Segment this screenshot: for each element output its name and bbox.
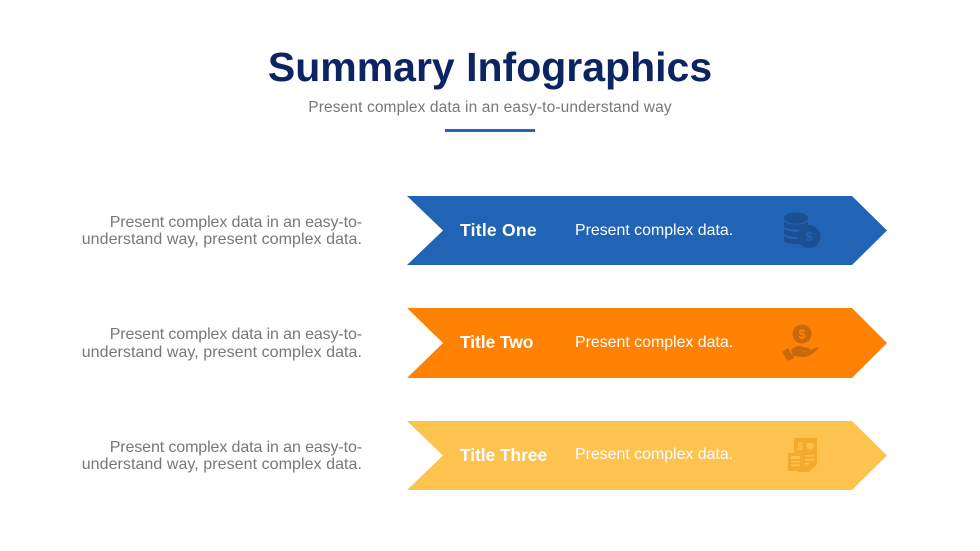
row two title: Title Two — [460, 332, 533, 352]
row one title: Title One — [460, 220, 537, 240]
row two left text — [82, 326, 362, 360]
row three description: Present complex data. — [575, 446, 733, 462]
icon: coins: $ — [805, 229, 813, 244]
row three left text — [82, 438, 362, 473]
arrow: three — [407, 421, 887, 490]
row one left text — [82, 214, 362, 248]
icon: financial document: $ — [797, 441, 803, 453]
row one description: Present complex data. — [575, 222, 733, 238]
row two left text: Present complex data in an easy-to- — [110, 326, 362, 343]
row one left text: understand way, present complex data. — [82, 231, 362, 248]
icon: coins — [784, 212, 820, 248]
arrow: one — [407, 196, 887, 265]
row two left text: understand way, present complex data. — [82, 344, 362, 360]
row three left text: Present complex data in an easy-to- — [110, 438, 362, 456]
arrow: two — [407, 308, 887, 378]
title: Summary Infographics — [268, 44, 712, 90]
icon: financial document — [788, 438, 817, 472]
icon: hand holding coin: $ — [799, 328, 806, 342]
row three title: Title Three — [460, 445, 547, 465]
row three left text: understand way, present complex data. — [82, 456, 362, 473]
icon: hand holding coin — [782, 324, 818, 361]
row one left text: Present complex data in an easy-to- — [110, 214, 362, 230]
row two description: Present complex data. — [575, 334, 733, 351]
title underline — [445, 129, 535, 132]
subtitle: Present complex data in an easy-to-understand way — [308, 98, 672, 116]
